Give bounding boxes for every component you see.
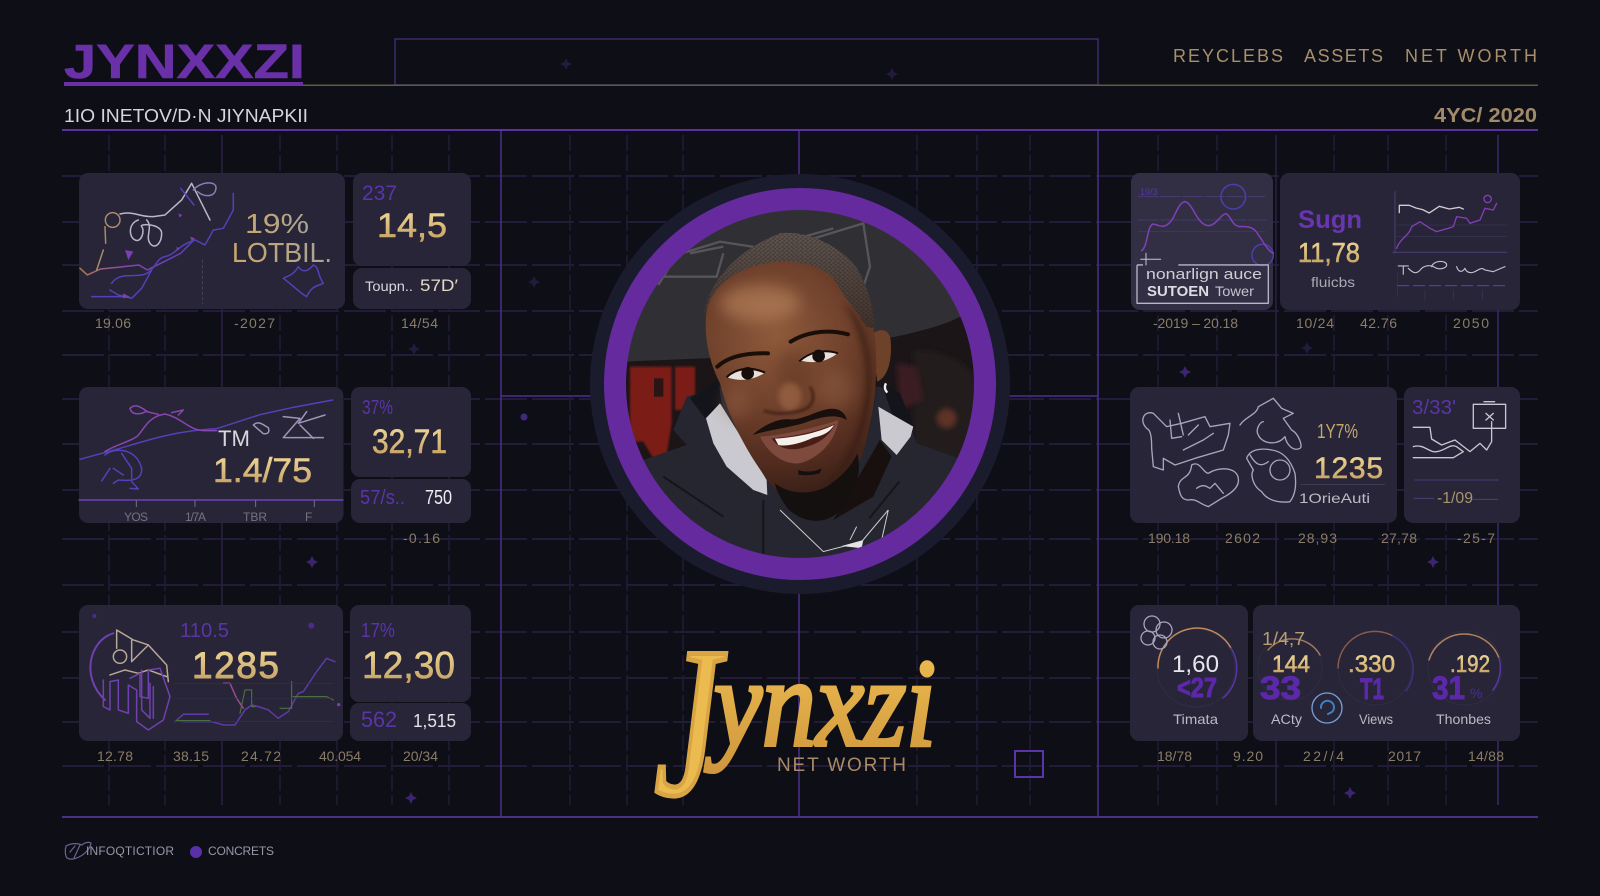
panel: left row 2 stat: 37% (362, 397, 393, 419)
callout text: nonarlign auce (1146, 266, 1262, 283)
necklace (780, 510, 888, 552)
date row 1 left: -2027 (234, 315, 275, 331)
stat: TM 1.4/75 (213, 426, 312, 490)
gauge: Views: T1 (1360, 673, 1384, 706)
date row 1 left: 19.06 (95, 315, 131, 331)
stat: 1Y7% 1235 (1299, 421, 1385, 506)
subtitle: 1IO INETOV/D·N JIYNAPKII (64, 106, 308, 126)
date row 2 right (1148, 530, 1495, 546)
date row 1 right: 2050 (1453, 315, 1489, 331)
header navigation: NET WORTH (1405, 46, 1537, 66)
stat: 1Y7% 1235: 1OrieAuti (1299, 490, 1370, 506)
panel: left row 1 stat: 14,5 (377, 207, 447, 245)
eyebrows (717, 332, 848, 367)
stat: 110.5 1285: 1285 (192, 645, 279, 686)
date row 1 right: 42.76 (1360, 315, 1397, 331)
logo: Jynxzi script: ynxzi (704, 635, 936, 773)
section rule (62, 129, 1538, 131)
panel: right row 3 single gauge: 1,60 (1172, 651, 1219, 678)
date row 2 right: -25-7 (1457, 530, 1495, 546)
mustache (753, 409, 847, 435)
right eye (799, 350, 838, 362)
stat: TM 1.4/75: TM (218, 426, 250, 451)
stat: Sugn 11,78: 11,78 (1298, 237, 1360, 268)
goatee (775, 453, 859, 521)
axis labels: TBR (243, 510, 267, 524)
logo: Jynxzi script: J (654, 604, 727, 842)
head (706, 262, 876, 494)
date row 1 right: -2019 – 20.18 (1153, 315, 1238, 331)
hoodie (644, 386, 958, 558)
header title: JYNXXZI: JYNXXZI (64, 36, 305, 89)
gauge: Thonbes: % (1470, 685, 1482, 701)
axis labels: F (305, 510, 312, 524)
stat: 19% LOTBIL (232, 208, 332, 268)
logo: Jynxzi script (654, 604, 936, 842)
gauge: Thonbes: 31 (1432, 670, 1465, 706)
date label: 4YC/ 2020 (1434, 105, 1537, 127)
footer legend: INFOQTICTIOR (86, 844, 174, 858)
decorative square marker (1015, 751, 1043, 777)
neck (833, 440, 892, 520)
panel: right row 2 stat: -1/09 (1437, 490, 1473, 507)
nose (764, 383, 813, 413)
icon: flower (1141, 616, 1172, 649)
gauge: Views: .330 (1348, 651, 1395, 678)
header navigation: REYCLEBS (1173, 46, 1283, 66)
panel: left row 1 stat (353, 173, 471, 266)
icon: framed chart (1413, 402, 1506, 499)
axis labels (124, 510, 312, 524)
panel: left row 1 stat: 237 (362, 182, 397, 205)
panel: left row 3 stat (350, 605, 471, 702)
callout text: SUTOEN (1147, 283, 1209, 300)
gauge rings (1258, 631, 1502, 705)
earring (885, 383, 887, 393)
date row 1 right (1153, 315, 1489, 331)
stat: 19% LOTBIL: 19% (245, 208, 309, 239)
date row 3 right: 22//4 (1303, 748, 1344, 764)
map doodle (1143, 398, 1301, 507)
line chart (1393, 192, 1507, 300)
date row 3 left: 20/34 (403, 748, 438, 764)
panel: left row 1 sub stat: 57D′ (420, 276, 458, 295)
footer rule (62, 816, 1538, 818)
stat: 19% LOTBIL: LOTBIL. (232, 237, 332, 268)
callout text: Tower (1215, 283, 1254, 299)
panel: left row 2 stat: 32,71 (372, 423, 447, 461)
date row 2 right: 27,78 (1381, 530, 1417, 546)
gauge: Activity (1260, 629, 1310, 727)
panel: left row 3 sub stat (350, 703, 471, 741)
panel: left row 2 chart (79, 387, 344, 524)
stat: 110.5 1285 (180, 620, 279, 686)
hair (704, 233, 875, 328)
panel: left row 2 sub stat: 750 (425, 487, 452, 509)
panel: left row 3 sub stat: 562 (361, 707, 397, 732)
stat: Sugn 11,78: Sugn (1298, 206, 1362, 234)
gauge: Activity: 1/4,7 (1262, 629, 1305, 649)
panel: right row 1 chart (1131, 173, 1273, 310)
callout text (1146, 266, 1262, 300)
center portrait (590, 174, 1010, 594)
header navigation: ASSETS (1304, 46, 1383, 66)
logo subtitle: NET WORTH: NET WORTH (777, 755, 906, 776)
line chart with markers (1137, 184, 1273, 303)
axis labels: 1/7A (185, 510, 206, 524)
panel: right row 1 stat and chart (1280, 173, 1520, 310)
panel: right row 2 stat (1404, 387, 1520, 523)
stat: TM 1.4/75: 1.4/75 (213, 452, 312, 490)
panel: left row 2 sub stat (351, 479, 471, 523)
date row 1 left: 14/54 (401, 315, 438, 331)
mouth (760, 420, 838, 463)
date row 3 left: 12.78 (97, 748, 133, 764)
gauge: Thonbes (1432, 651, 1491, 727)
footer legend (65, 842, 274, 859)
gauge: Activity: 144 (1272, 651, 1310, 678)
panel: left row 3 stat: 12,30 (362, 645, 455, 687)
icon: city doodle (90, 614, 340, 730)
date row 3 left: 38.15 (173, 748, 209, 764)
map line chart (80, 183, 323, 303)
date row 3 left: 40.054 (319, 748, 361, 764)
gauge: Thonbes: Thonbes (1436, 711, 1491, 727)
panel: right row 2 map (1130, 387, 1397, 523)
header navigation (1173, 46, 1537, 66)
axis labels: YOS (124, 510, 148, 524)
stat: 1Y7% 1235: 1235 (1314, 452, 1383, 485)
gauge: Activity: ACty (1271, 711, 1302, 727)
footer legend: CONCRETS (208, 844, 274, 858)
panel: left row 3 chart (79, 605, 343, 741)
date row 2 right: 2602 (1225, 530, 1260, 546)
date row 2 left: -0.16 (403, 530, 440, 546)
gauge: Views (1348, 651, 1395, 727)
panel: left row 1 sub stat (353, 268, 471, 309)
date row 2 right: 28,93 (1298, 530, 1337, 546)
portrait background (626, 210, 974, 460)
ear (874, 330, 891, 382)
panel: right row 2 stat: 3/33' (1412, 397, 1456, 419)
date row 3 right: 9.20 (1233, 748, 1263, 764)
icon: legend glyph (65, 842, 91, 859)
stat: 1Y7% 1235: 1Y7% (1317, 421, 1358, 443)
icon: spiral (1312, 693, 1342, 723)
date row 1 right: 10/24 (1296, 315, 1334, 331)
small label: 19/3 (1140, 187, 1158, 197)
date row 3 left (97, 748, 438, 764)
panel: left row 3 sub stat: 1,515 (413, 711, 456, 731)
stat: Sugn 11,78 (1298, 206, 1362, 290)
gauge: Views: Views (1359, 711, 1393, 727)
panel: left row 1 chart (79, 173, 345, 309)
panel: left row 3 stat: 17% (361, 620, 395, 642)
gauge: Activity: 33 (1260, 670, 1301, 706)
date row 3 left: 24.72 (241, 748, 281, 764)
panel: right row 3 single gauge: Timata (1173, 711, 1218, 727)
panel: left row 1 sub stat: Toupn.. (365, 278, 413, 294)
gauge ring (1157, 628, 1237, 707)
date row 3 right: 18/78 (1157, 748, 1192, 764)
line chart (79, 400, 343, 507)
panel: right row 3 single gauge: <27 (1177, 672, 1217, 703)
date row 3 right: 14/88 (1468, 748, 1504, 764)
stat: 110.5 1285: 110.5 (180, 620, 229, 642)
gauge: Thonbes: .192 (1450, 651, 1490, 678)
date row 3 right: 2017 (1388, 748, 1421, 764)
date row 3 right (1157, 748, 1504, 764)
date row 1 left (95, 315, 438, 331)
header rule (303, 84, 1538, 86)
panel: left row 2 sub stat: 57/s.. (360, 487, 405, 509)
panel: left row 2 stat (351, 387, 471, 477)
panel: right row 3 single gauge (1130, 605, 1248, 741)
hood lining (706, 403, 913, 495)
date row 2 right: 190.18 (1148, 530, 1190, 546)
panel: right row 3 gauges (1253, 605, 1520, 741)
stat: Sugn 11,78: fluicbs (1311, 274, 1355, 290)
left eye (727, 367, 765, 380)
